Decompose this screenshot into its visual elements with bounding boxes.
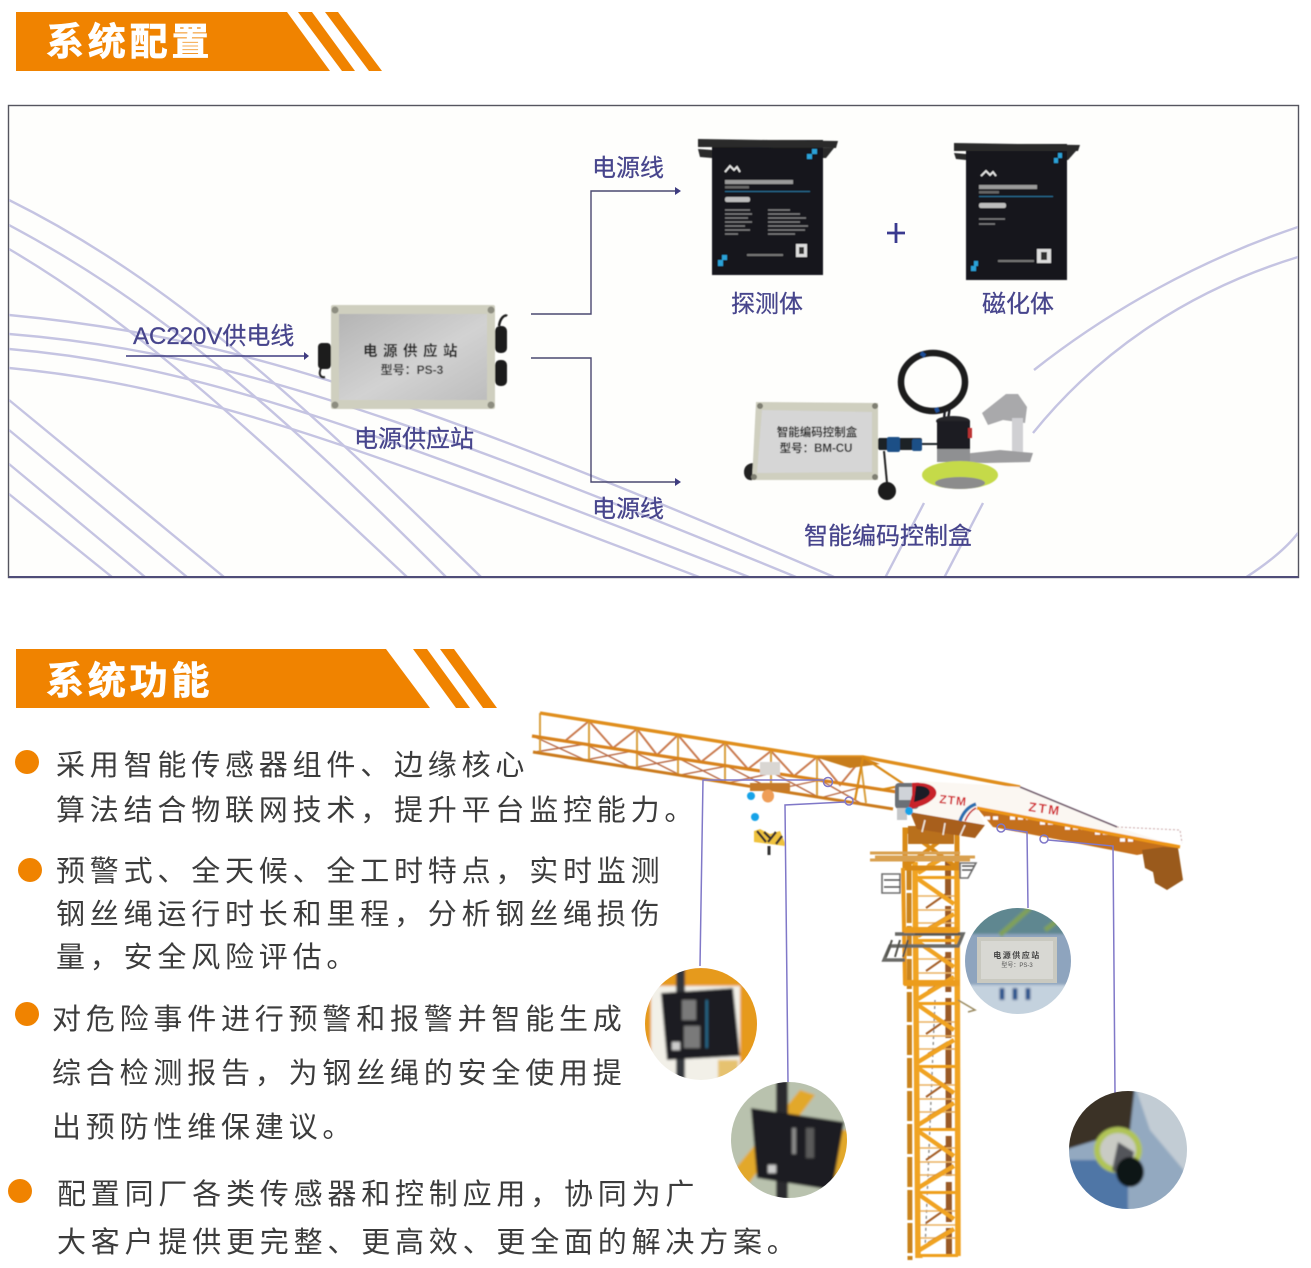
label: AC220V供电线 with arrow xyxy=(126,323,309,360)
text block: function point 1: 算法结合物联网技术，提升平台监控能力。 xyxy=(56,794,698,827)
text block: function point 4 xyxy=(8,1178,801,1259)
label: AC220V供电线 with arrow: AC220V供电线 xyxy=(133,323,294,350)
crane mast xyxy=(903,826,958,1260)
text block: function point 3: 对危险事件进行预警和报警并智能生成 xyxy=(52,1003,627,1036)
text block: function point 1 xyxy=(15,749,698,827)
panel: system configuration diagram xyxy=(8,106,1298,578)
connector arrow: upper power line xyxy=(531,187,681,314)
text block: function point 3: 出预防性维保建议。 xyxy=(52,1111,356,1144)
text block: function point 2: 预警式、全天候、全工时特点，实时监测 xyxy=(56,855,664,888)
heading banner: 系统配置 xyxy=(16,12,382,71)
device: smart encoder control box with encoder: 智能编码控制盒 xyxy=(777,425,858,439)
device: power supply station xyxy=(318,305,507,409)
heading banner: 系统功能 xyxy=(16,649,497,708)
device: smart encoder control box with encoder xyxy=(744,353,1033,500)
text block: function point 3 xyxy=(15,1002,627,1144)
inset photo: power station on site xyxy=(965,908,1071,1014)
crane platforms xyxy=(870,853,976,1012)
label: 智能编码控制盒: 智能编码控制盒 xyxy=(804,523,972,550)
inset photo: sensor on crane mast xyxy=(645,968,757,1080)
device: detector body xyxy=(698,139,838,275)
device: power supply station: 电源供应站 xyxy=(363,342,463,360)
text block: function point 4: 大客户提供更完整、更高效、更全面的解决方案。 xyxy=(57,1226,801,1259)
text block: function point 2: 钢丝绳运行时长和里程，分析钢丝绳损伤 xyxy=(56,898,664,931)
crane trolley and hook block xyxy=(750,762,790,855)
illustration: tower crane xyxy=(532,713,1183,1260)
inset photo: power station on site: 电源供应站 xyxy=(993,950,1041,960)
crane counterweight xyxy=(1142,847,1183,890)
text block: function point 1: 采用智能传感器组件、边缘核心 xyxy=(56,749,529,782)
text block: function point 2 xyxy=(18,855,664,974)
heading banner: 系统配置: 系统配置 xyxy=(46,22,213,64)
text block: function point 4: 配置同厂各类传感器和控制应用，协同为广 xyxy=(57,1178,699,1211)
label: upper 电源线: 电源线 xyxy=(592,155,664,182)
label: lower 电源线: 电源线 xyxy=(592,496,664,523)
callout line: detector inset 2 xyxy=(785,797,853,1082)
callout line: encoder inset xyxy=(1040,835,1115,1093)
crane slewing section with ZTM branding xyxy=(895,781,1182,855)
blue sensor dots xyxy=(747,792,913,821)
device: smart encoder control box with encoder: 型号：BM-CU xyxy=(780,442,852,455)
label: 电源供应站: 电源供应站 xyxy=(354,426,474,453)
label: 磁化体: 磁化体 xyxy=(982,291,1054,318)
text block: function point 3: 综合检测报告，为钢丝绳的安全使用提 xyxy=(52,1057,627,1090)
crane jib xyxy=(532,713,1020,809)
device: power supply station: 型号：PS-3 xyxy=(381,363,444,377)
label: 探测体: 探测体 xyxy=(731,291,803,318)
callout line: power supply inset xyxy=(997,824,1028,908)
callout line: detector inset 1 xyxy=(700,778,832,966)
inset photo: sensor on rope xyxy=(731,1082,847,1198)
text block: function point 2: 量，安全风险评估。 xyxy=(56,941,360,974)
inset photo: encoder wheel close-up xyxy=(1069,1091,1187,1209)
inset photo: power station on site: 型号：PS-3 xyxy=(1001,961,1033,969)
heading banner: 系统功能: 系统功能 xyxy=(46,661,213,703)
icon: plus sign xyxy=(887,223,905,243)
device: magnetizing body xyxy=(954,143,1080,280)
connector arrow: lower power line xyxy=(531,358,681,486)
crane slewing section with ZTM branding: ZTM xyxy=(1028,799,1062,819)
crane slewing section with ZTM branding: ZTM xyxy=(939,792,968,809)
